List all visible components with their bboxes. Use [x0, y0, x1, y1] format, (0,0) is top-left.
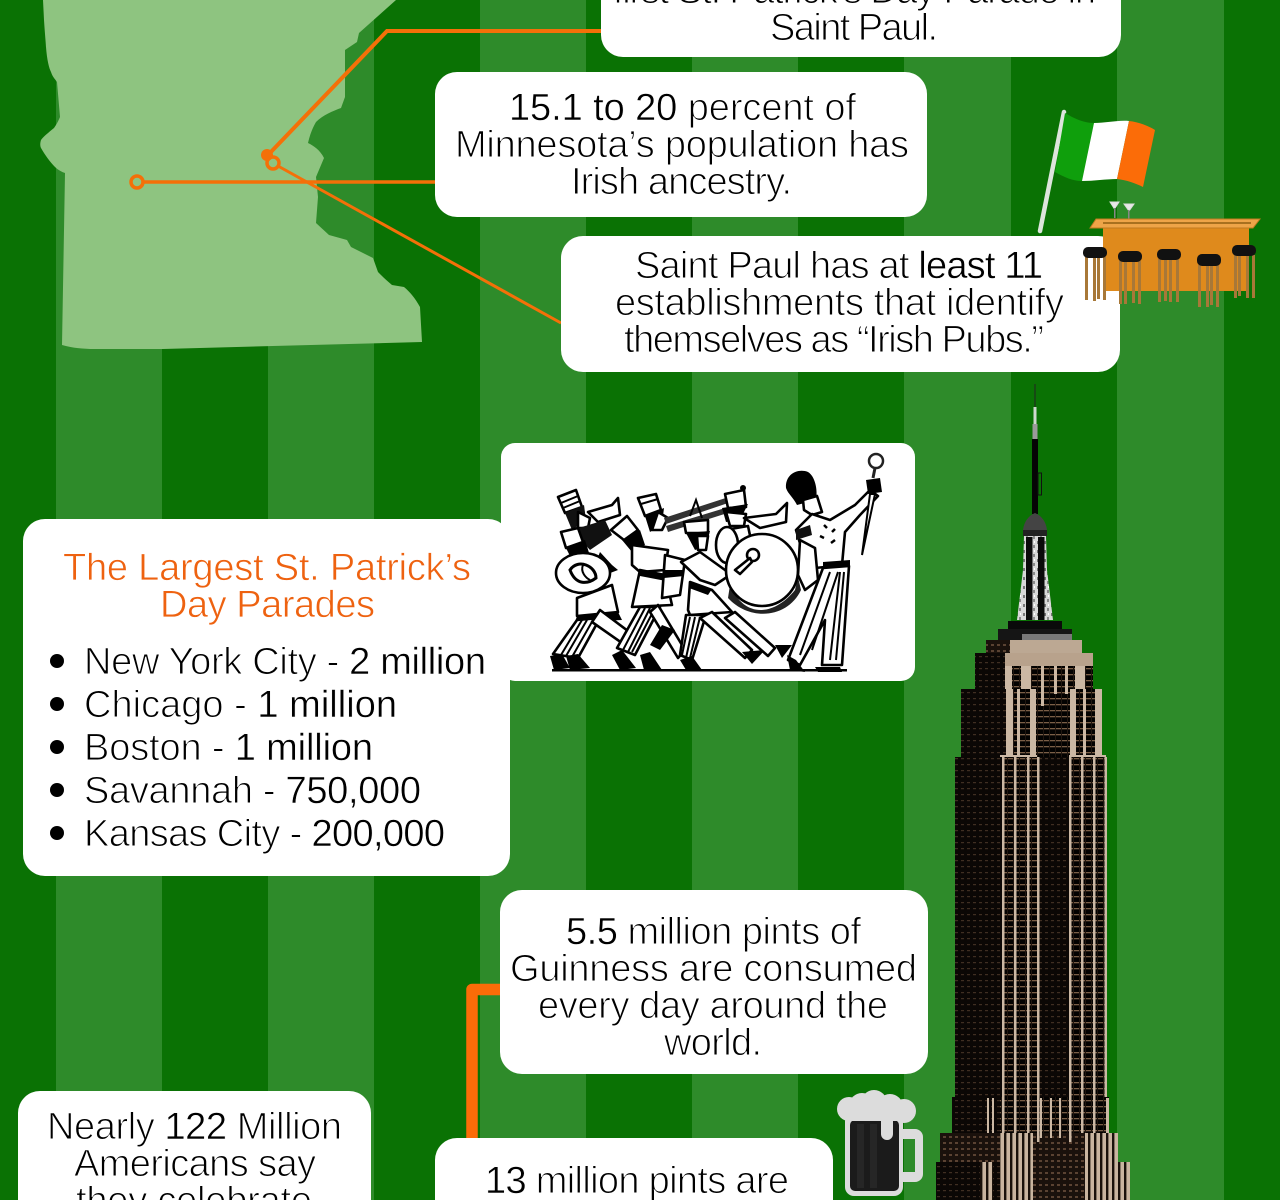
callout: Guinness pints: 5.5 million pints of — [566, 911, 861, 953]
callout: Guinness pints: Guinness are consumed — [510, 948, 917, 990]
connector: Irish pubs callout — [267, 157, 561, 323]
callout: Guinness pints: world. — [663, 1022, 762, 1064]
heading: largest parades — [63, 547, 471, 626]
connector: Guinness to pints callout — [472, 990, 502, 1140]
callout: Guinness pints — [500, 890, 928, 1074]
callout: Irish pubs: themselves as “Irish Pubs.” — [624, 319, 1044, 361]
musician: bass drummer front — [680, 500, 792, 670]
setbacks and shaft — [936, 640, 1130, 1200]
callout: Irish pubs: establishments that identify — [615, 282, 1064, 324]
heading: largest parades: The Largest St. Patrick’s — [63, 547, 471, 589]
drum major with baton — [786, 454, 883, 672]
icon: bar with stools — [1083, 202, 1260, 307]
base pier panels — [980, 1133, 1130, 1200]
callout: 13 million pints — [435, 1138, 833, 1200]
callout: Guinness pints: every day around the — [538, 985, 888, 1027]
callout: first parade: Saint Paul. — [770, 7, 938, 49]
mast — [1023, 384, 1047, 536]
callout: Irish pubs: Saint Paul has at least 11 — [635, 245, 1043, 287]
list: parade cities — [50, 641, 486, 855]
connector: Irish ancestry callout — [131, 176, 435, 188]
heading: largest parades: Day Parades — [160, 584, 375, 626]
callout: first parade — [601, 0, 1121, 57]
musician: trombone player — [611, 494, 737, 670]
callout: Irish pubs — [561, 236, 1120, 372]
callout: Irish ancestry — [435, 72, 927, 217]
callout: Americans celebrating: Americans say — [74, 1143, 316, 1185]
icon: beer mug — [837, 1090, 923, 1196]
list: parade cities: Chicago - 1 million — [84, 684, 397, 726]
spire — [998, 536, 1072, 640]
callout: Irish ancestry: 15.1 to 20 percent of — [509, 87, 856, 129]
callout: Americans celebrating: Nearly 122 Million — [47, 1106, 342, 1148]
illustration: marching band — [550, 454, 883, 672]
musician: trumpet player with drum — [716, 485, 801, 614]
callout: Americans celebrating — [18, 1091, 371, 1200]
list: parade cities: Boston - 1 million — [84, 727, 373, 769]
map: Minnesota — [40, 0, 422, 349]
musician: horn player — [550, 490, 640, 670]
tan piers — [987, 666, 1109, 1142]
panel: largest parades — [23, 519, 510, 876]
callout: Irish ancestry: Minnesota’s population has — [455, 124, 909, 166]
icon: Irish flag — [1040, 112, 1155, 231]
list: parade cities: Kansas City - 200,000 — [84, 813, 445, 855]
panel: marching band image — [501, 443, 915, 681]
connector: Saint Paul parade callout — [261, 31, 601, 161]
list: parade cities: Savannah - 750,000 — [84, 770, 421, 812]
icon: Empire State Building — [936, 384, 1130, 1200]
list: parade cities: New York City - 2 million — [84, 641, 486, 683]
callout: Irish ancestry: Irish ancestry. — [571, 161, 792, 203]
martini glasses — [1110, 202, 1134, 220]
